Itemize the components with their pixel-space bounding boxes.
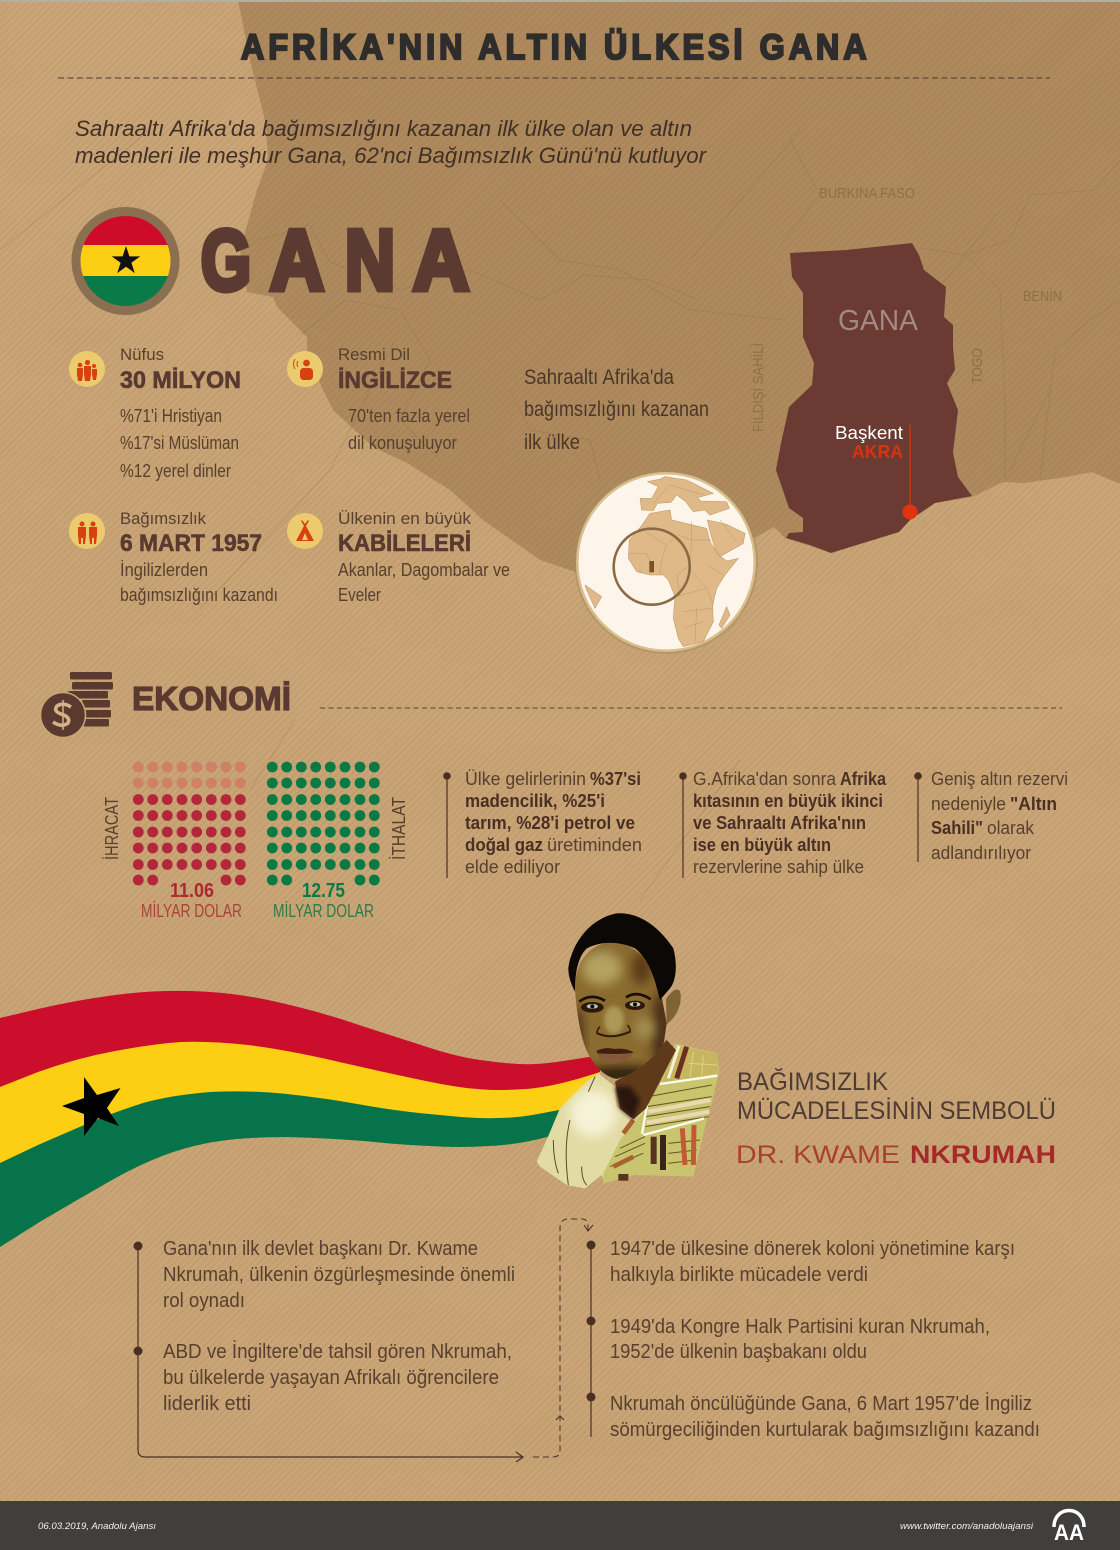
economy fact: income sources <box>443 769 642 878</box>
stat: population: %12 yerel dinler <box>120 460 231 481</box>
heading: symbol of the struggle: DR. KWAME <box>736 1141 900 1169</box>
economy fact: gold coast: Sahili" <box>931 818 983 838</box>
heading: symbol of the struggle: BAĞIMSIZLIK <box>737 1067 888 1096</box>
economy fact: gold reserves <box>679 769 887 878</box>
timeline: right column: 1952'de ülkenin başbakanı oldu <box>610 1341 867 1363</box>
stat: largest tribes: Eveler <box>338 584 381 605</box>
locator globe <box>574 470 758 654</box>
stat: population: %71'i Hristiyan <box>120 405 222 426</box>
icon: coin stack <box>40 672 113 738</box>
map label: Ghana: GANA <box>838 305 919 337</box>
stat: population: 30 MİLYON <box>120 367 241 394</box>
economy fact: gold reserves: rezervlerine sahip ülke <box>693 857 864 877</box>
heading: economy: EKONOMİ <box>132 680 291 717</box>
dot chart: imports: 12.75 <box>302 880 345 902</box>
economy fact: gold reserves: ve Sahraaltı Afrika'nın <box>693 813 866 833</box>
economy fact: gold reserves: G.Afrika'dan sonra <box>693 769 837 789</box>
stat: official language <box>287 346 470 453</box>
stat: independence: bağımsızlığını kazandı <box>120 584 278 605</box>
subtitle: Sahraaltı Afrika'da bağımsızlığını kazanan ilk ülke olan ve altın <box>75 116 692 141</box>
economy fact: income sources: doğal gaz <box>465 835 543 855</box>
footer bar: AA <box>1054 1520 1084 1545</box>
big heading: GANA: A <box>413 214 469 308</box>
map labels: neighbours: FİLDİŞİ SAHİLİ <box>749 343 767 432</box>
economy fact: gold coast: nedeniyle <box>931 794 1006 814</box>
dot chart: exports: 11.06 <box>170 880 214 902</box>
timeline: left column: rol oynadı <box>163 1290 245 1312</box>
footer bar <box>0 1501 1120 1550</box>
timeline: right column: sömürgeciliğinden kurtularak bağımsızlığını kazandı <box>610 1419 1040 1441</box>
text: first country note: Sahraaltı Afrika'da <box>524 366 674 389</box>
timeline: left column: Nkrumah, ülkenin özgürleşmesinde önemli <box>163 1264 515 1286</box>
title: AFRİKA'NIN ALTIN ÜLKESİ GANA <box>241 29 867 67</box>
timeline: left column: ABD ve İngiltere'de tahsil gören Nkrumah, <box>163 1340 512 1363</box>
stat: largest tribes: KABİLELERİ <box>338 530 471 557</box>
timeline: left column <box>134 1238 523 1462</box>
economy fact: gold reserves: ise en büyük altın <box>693 835 831 855</box>
economy fact: income sources: madencilik, %25'i <box>465 791 605 811</box>
timeline: left column: liderlik etti <box>163 1393 251 1415</box>
stat: official language: 70'ten fazla yerel <box>348 405 470 426</box>
big heading: GANA: N <box>345 214 395 308</box>
stat: independence: İngilizlerden <box>120 559 208 580</box>
arrow: dashed connector <box>533 1219 593 1457</box>
stat: independence <box>69 510 278 605</box>
stat: official language: Resmi Dil <box>338 346 410 364</box>
economy fact: income sources: elde ediliyor <box>465 857 560 877</box>
economy fact: gold reserves: kıtasının en büyük ikinci <box>693 791 883 811</box>
text: first country note: ilk ülke <box>524 431 580 454</box>
map labels: neighbours <box>749 185 1062 432</box>
map marker: capital Accra <box>835 423 918 520</box>
heading: symbol of the struggle: MÜCADELESİNİN SEMBOLÜ <box>737 1096 1056 1125</box>
timeline: right column <box>586 1238 1040 1441</box>
subtitle: madenleri ile meşhur Gana, 62'nci Bağımsızlık Günü'nü kutluyor <box>75 143 707 168</box>
stat: independence: 6 MART 1957 <box>120 530 262 557</box>
waving ghana flag <box>0 990 600 1247</box>
icon: round ghana flag <box>72 207 180 315</box>
stat: official language: İNGİLİZCE <box>338 367 452 394</box>
text: first country note <box>524 366 709 454</box>
dot chart: imports: İTHALAT <box>389 797 409 860</box>
economy fact: gold coast: "Altın <box>1010 794 1057 814</box>
dot chart: imports: MİLYAR DOLAR <box>273 901 374 921</box>
stat: population: Nüfus <box>120 346 164 364</box>
footer bar: 06.03.2019, Anadolu Ajansı <box>38 1521 156 1532</box>
timeline: right column: Nkrumah öncülüğünde Gana, 6 Mart 1957'de İngiliz <box>610 1392 1032 1415</box>
economy fact: gold coast: adlandırılıyor <box>931 843 1031 863</box>
economy fact: income sources: tarım, %28'i petrol ve <box>465 813 635 833</box>
stat: largest tribes: Ülkenin en büyük <box>338 510 472 528</box>
dot chart: exports <box>102 762 246 921</box>
economy fact: income sources: %37'si <box>590 769 641 789</box>
map labels: neighbours: TOGO <box>969 348 986 384</box>
timeline: right column: halkıyla birlikte mücadele verdi <box>610 1264 868 1286</box>
stat: population: %17'si Müslüman <box>120 432 239 453</box>
stat: largest tribes: Akanlar, Dagombalar ve <box>338 559 510 580</box>
timeline: left column: bu ülkelerde yaşayan Afrikalı öğrencilere <box>163 1367 499 1389</box>
map labels: neighbours: BURKINA FASO <box>819 185 915 202</box>
map: west africa land mass <box>238 0 1120 580</box>
economy fact: gold reserves: Afrika <box>840 769 887 789</box>
economy fact: gold coast: olarak <box>987 818 1035 838</box>
dot chart: exports: İHRACAT <box>102 797 122 860</box>
map labels: neighbours: BENİN <box>1023 287 1062 305</box>
timeline: left column: Gana'nın ilk devlet başkanı Dr. Kwame <box>163 1238 478 1260</box>
map marker: capital Accra: Başkent <box>835 423 903 443</box>
economy fact: income sources: Ülke gelirlerinin <box>465 769 586 789</box>
text: first country note: bağımsızlığını kazanan <box>524 398 709 421</box>
heading: symbol of the struggle <box>736 1067 1056 1169</box>
economy fact: gold coast <box>914 769 1068 863</box>
heading: symbol of the struggle: NKRUMAH <box>910 1141 1056 1169</box>
timeline: right column: 1949'da Kongre Halk Partisini kuran Nkrumah, <box>610 1316 990 1338</box>
footer bar: www.twitter.com/anadoluajansi <box>900 1521 1034 1532</box>
timeline: right column: 1947'de ülkesine dönerek koloni yönetimine karşı <box>610 1238 1015 1260</box>
map marker: capital Accra: AKRA <box>852 442 903 462</box>
subtitle <box>75 116 707 168</box>
big heading: GANA: A <box>270 214 324 308</box>
big heading: GANA: G <box>201 214 251 308</box>
economy fact: income sources: üretiminden <box>547 835 642 855</box>
economy fact: gold coast: Geniş altın rezervi <box>931 769 1068 789</box>
dot chart: imports <box>267 762 409 921</box>
stat: independence: Bağımsızlık <box>120 510 207 528</box>
map: ghana shape <box>776 243 972 553</box>
stat: largest tribes <box>287 510 510 605</box>
stat: official language: dil konuşuluyor <box>348 432 457 453</box>
portrait: Dr. Kwame Nkrumah <box>537 913 719 1188</box>
stat: population <box>69 346 241 481</box>
dot chart: exports: MİLYAR DOLAR <box>141 901 242 921</box>
